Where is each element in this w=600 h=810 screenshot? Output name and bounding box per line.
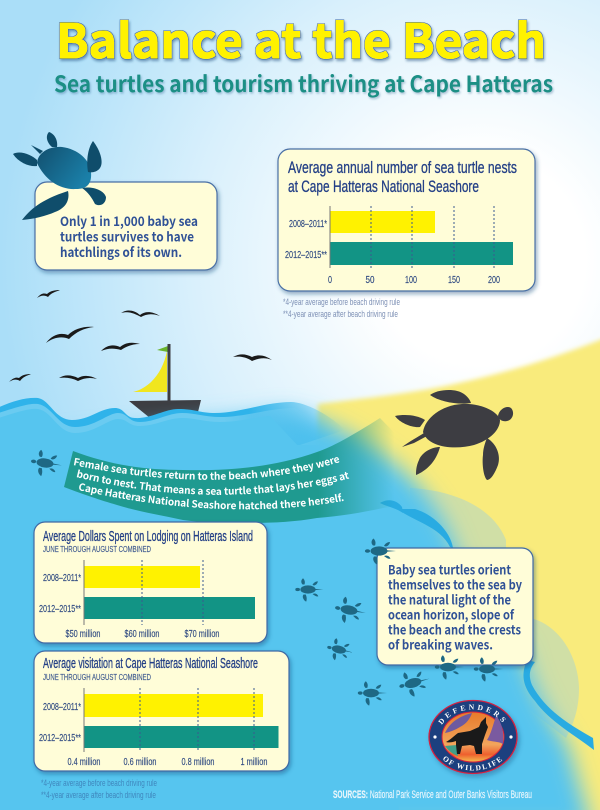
chart: dollars spent on lodging: 2008–2011* (43, 572, 81, 584)
chart: sea turtle nests (278, 149, 535, 291)
birds (9, 290, 272, 382)
chart: dollars spent on lodging: $70 million (184, 628, 220, 640)
bar: 2008-2011 (330, 211, 435, 233)
chart: dollars spent on lodging (34, 522, 267, 643)
banner: female sea turtles: born to nest. That means a sea turtle that lays her eggs at (76, 469, 350, 495)
chart: sea turtle nests: 100 (405, 274, 417, 286)
chart: sea turtle nests: 2012–2015** (285, 249, 327, 261)
bar: 2008-2011 (84, 694, 263, 717)
chart: dollars spent on lodging: Average Dollars Spent on Lodging on Hatteras Island (43, 528, 253, 545)
chart: sea turtle nests: 200 (488, 274, 500, 286)
chart: sea turtle nests: Average annual number of sea turtle nests (288, 158, 517, 177)
chart: visitation: 0.8 million (182, 756, 215, 768)
callout: 1 in 1,000: turtles survives to have (60, 226, 194, 246)
chart: visitation: 2012–2015** (39, 732, 81, 744)
chart: visitation: 2008–2011* (43, 701, 81, 713)
callout: baby sea turtles: of breaking waves. (388, 634, 493, 654)
subtitle: Sea turtles and tourism thriving at Cape Hatteras (54, 67, 553, 99)
chart: dollars spent on lodging: $60 million (124, 628, 160, 640)
bar: 2008-2011 (84, 566, 200, 588)
callout: 1 in 1,000: Only 1 in 1,000 baby sea (60, 211, 198, 230)
logo: Defenders of Wildlife (428, 700, 522, 780)
sea (0, 412, 592, 810)
chart: sea turtle nests: 2008–2011* (289, 218, 327, 230)
logo: Defenders of Wildlife: DEFENDERS (438, 704, 506, 725)
chart: sea turtle nests: 150 (448, 274, 460, 286)
chart: visitation (34, 651, 289, 771)
callout: 1 in 1,000 (35, 182, 217, 270)
chart: sea turtle nests: 50 (366, 274, 375, 286)
chart: sea turtle nests: 0 (328, 274, 332, 286)
footnotes: lower charts (41, 778, 157, 801)
chart: visitation: 0.4 million (68, 756, 101, 768)
callout: baby sea turtles: Baby sea turtles orient (388, 560, 512, 578)
callout: baby sea turtles: the beach and the crests (388, 620, 521, 638)
footnotes: lower charts: *4-year average before beach driving rule (41, 778, 157, 789)
callout: baby sea turtles: the natural light of the (388, 590, 511, 608)
chart: dollars spent on lodging: JUNE THROUGH AUGUST COMBINED (43, 544, 151, 554)
footnotes: nests chart: *4-year average before beach driving rule (283, 297, 400, 308)
icon: dark turtle on sand (395, 390, 513, 480)
logo: Defenders of Wildlife: OF WILDLIFE (443, 756, 502, 770)
sailboat (129, 344, 201, 418)
bar: 2012-2015 (84, 726, 278, 748)
chart: visitation: JUNE THROUGH AUGUST COMBINED (43, 672, 151, 682)
chart: dollars spent on lodging: $50 million (66, 628, 101, 640)
bar: 2012-2015 (330, 242, 513, 265)
footnotes: nests chart: **4-year average after beach driving rule (283, 309, 398, 320)
wave crest (0, 398, 400, 810)
icon: baby turtles in water (29, 449, 433, 706)
icon: blue turtle (13, 132, 106, 220)
chart: visitation: Average visitation at Cape Hatteras National Seashore (43, 655, 258, 672)
chart: visitation: 1 million (240, 756, 268, 768)
footnotes: lower charts: **4-year average after beach driving rule (41, 790, 156, 801)
callout: baby sea turtles: themselves to the sea by (388, 574, 523, 594)
chart: visitation: 0.6 million (124, 756, 157, 768)
chart: dollars spent on lodging: 2012–2015** (39, 603, 81, 615)
banner: female sea turtles: Cape Hatteras National Seashore hatched there herself. (79, 483, 344, 510)
callout: 1 in 1,000: hatchlings of its own. (60, 242, 182, 261)
beach sand (300, 336, 600, 810)
footnotes: nests chart (283, 297, 400, 320)
banner: female sea turtles (64, 418, 392, 523)
callout: baby sea turtles: ocean horizon, slope of (388, 604, 515, 624)
title: Balance at the Beach (56, 3, 546, 72)
banner: female sea turtles: Female sea turtles return to the beach where they were (74, 457, 340, 480)
tidal lobes on sand (410, 488, 579, 738)
water streaks (380, 500, 594, 750)
icon: baby turtles on callout edge (365, 538, 503, 682)
bar: 2012-2015 (84, 597, 255, 619)
callout: baby sea turtles (377, 548, 533, 665)
chart: sea turtle nests: at Cape Hatteras National Seashore (288, 177, 479, 196)
